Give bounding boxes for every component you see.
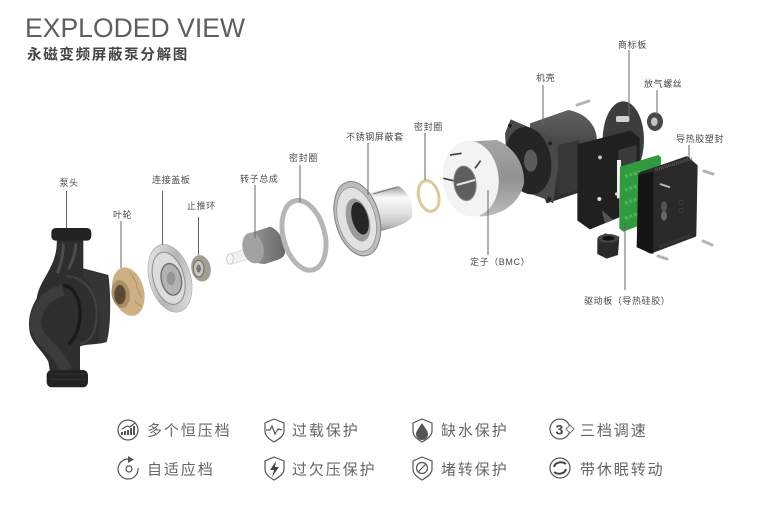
part: seal ring one xyxy=(275,196,333,275)
part: connecting cover plate xyxy=(141,239,199,317)
label: driver board: 驱动板（导热硅胶） xyxy=(584,295,670,306)
label: seal ring two xyxy=(414,121,443,180)
label: nameplate xyxy=(618,39,647,117)
label: stainless steel sleeve xyxy=(346,131,404,195)
label: connecting cover plate xyxy=(152,174,190,245)
label: pump head: 泵头 xyxy=(60,178,79,188)
feature: three-speed control xyxy=(550,419,648,440)
part: motor housing xyxy=(500,110,597,203)
part: thrust ring xyxy=(189,253,213,283)
label: thrust ring: 止推环 xyxy=(187,200,216,211)
part: vent screw xyxy=(647,112,663,131)
label: connecting cover plate: 连接盖板 xyxy=(152,174,190,185)
label: seal ring one: 密封圈 xyxy=(289,152,318,163)
feature: water shortage protection xyxy=(413,419,509,442)
feature: over and under voltage protection xyxy=(265,457,377,480)
label: seal ring one xyxy=(289,152,318,202)
label: stator xyxy=(470,190,530,267)
label: stainless steel sleeve: 不锈钢屏蔽套 xyxy=(346,131,404,142)
label: vent screw xyxy=(644,78,682,115)
feature: multiple constant pressure levels xyxy=(118,420,232,440)
part: nameplate disc xyxy=(603,101,644,179)
feature: adaptive level: 自适应档 xyxy=(147,460,215,478)
title: EXPLODED VIEW xyxy=(25,13,245,43)
feature: adaptive level xyxy=(118,456,215,479)
feature: over and under voltage protection: 过欠压保护 xyxy=(292,462,377,478)
part: impeller xyxy=(107,264,149,319)
label: housing: 机壳 xyxy=(536,72,555,83)
label: nameplate: 商标板 xyxy=(618,39,647,50)
feature: water shortage protection: 缺水保护 xyxy=(441,422,509,440)
part: pump head xyxy=(29,228,110,387)
part: stator xyxy=(439,138,524,219)
label: stator: 定子（BMC） xyxy=(470,256,530,267)
feature: three-speed control: 三档调速 xyxy=(580,422,648,440)
label: thrust ring xyxy=(187,200,216,255)
label: rotor assembly xyxy=(240,173,278,238)
label: pump head xyxy=(60,178,79,228)
feature: overload protection: 过载保护 xyxy=(292,422,360,440)
part: small screws xyxy=(577,101,713,259)
label: vent screw: 放气螺丝 xyxy=(644,78,682,89)
feature: blockage protection: 堵转保护 xyxy=(441,462,509,478)
subtitle: 永磁变频屏蔽泵分解图 xyxy=(27,46,189,64)
feature: sleep-mode operation xyxy=(550,458,665,478)
label: seal ring two: 密封圈 xyxy=(414,121,443,132)
label: sealed cover: 导热胶塑封 xyxy=(676,133,724,144)
part: seal ring two xyxy=(415,178,442,214)
part: stainless steel shielding sleeve xyxy=(326,176,412,261)
feature: sleep-mode operation: 带休眠转动 xyxy=(580,462,665,478)
feature: multiple constant pressure levels: 多个恒压档 xyxy=(147,422,232,440)
part: plastic box frame xyxy=(578,132,639,228)
label: housing xyxy=(536,72,555,125)
label: sealed cover xyxy=(676,133,724,158)
feature: blockage protection xyxy=(413,457,509,480)
feature: overload protection xyxy=(265,419,360,442)
feature: three-speed control: 3 xyxy=(556,422,564,438)
part: rotor assembly xyxy=(227,227,285,266)
label: driver board xyxy=(584,222,670,306)
label: rotor assembly: 转子总成 xyxy=(240,173,278,184)
label: impeller xyxy=(113,209,132,268)
part: driver board xyxy=(619,155,661,232)
part: nut xyxy=(597,233,619,259)
label: impeller: 叶轮 xyxy=(113,209,132,220)
part: heat-conducting sealed cover xyxy=(637,158,696,254)
